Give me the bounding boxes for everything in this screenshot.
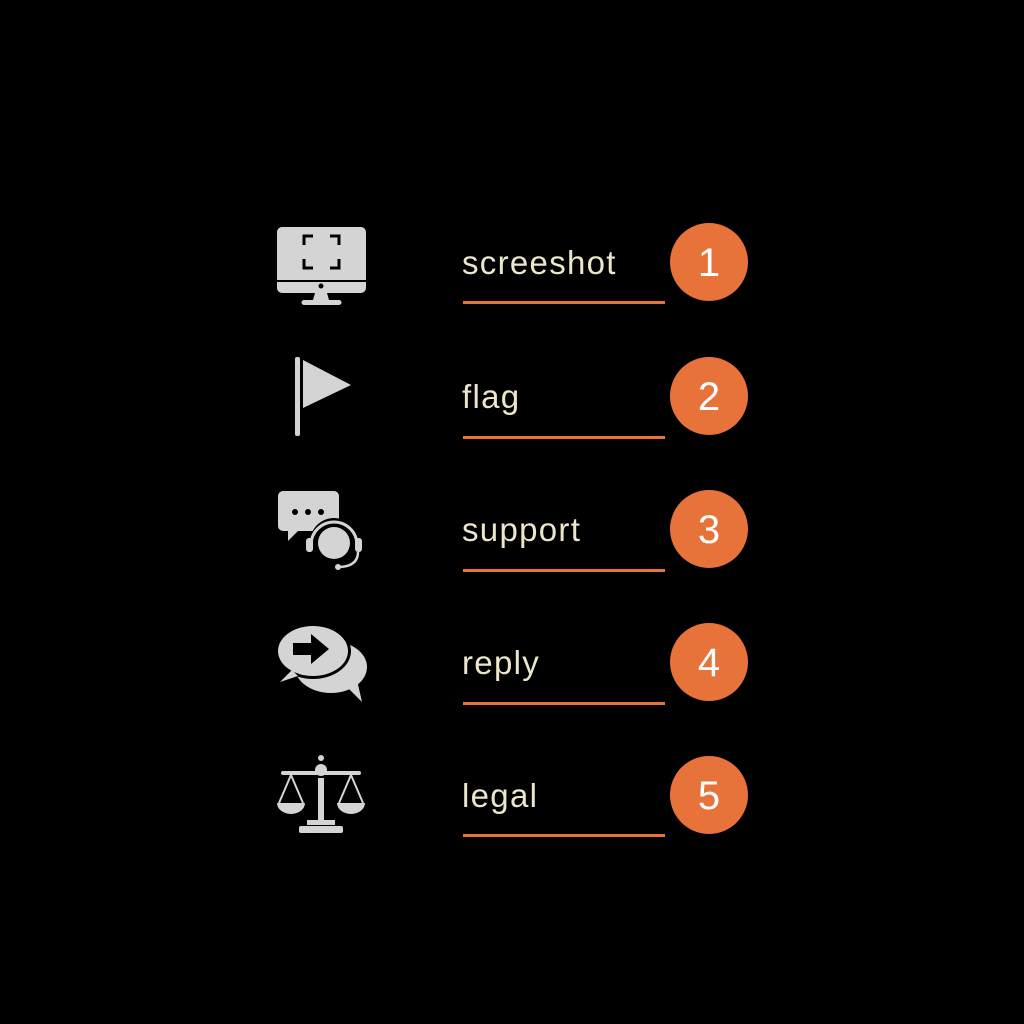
- row 5: 5: [698, 774, 720, 818]
- row 1: [462, 223, 748, 304]
- row 3: support: [462, 511, 581, 548]
- row 2: flag: [462, 378, 520, 415]
- row 3: 3: [698, 508, 720, 552]
- icon: reply: [275, 623, 367, 702]
- row 1: screeshot: [462, 244, 617, 281]
- icon: flag: [295, 357, 351, 436]
- row 4: 4: [698, 641, 720, 685]
- row 5: [462, 756, 748, 837]
- row 4: [462, 623, 748, 705]
- row 3: [462, 490, 748, 572]
- row 2: [462, 357, 748, 439]
- row 2: 2: [698, 375, 720, 419]
- icon: monitor screenshot: [277, 227, 366, 305]
- icon: support: [278, 491, 362, 570]
- row 1: 1: [698, 241, 720, 285]
- row 4: reply: [462, 644, 540, 681]
- icon: legal scale: [277, 755, 365, 833]
- row 5: legal: [462, 777, 538, 814]
